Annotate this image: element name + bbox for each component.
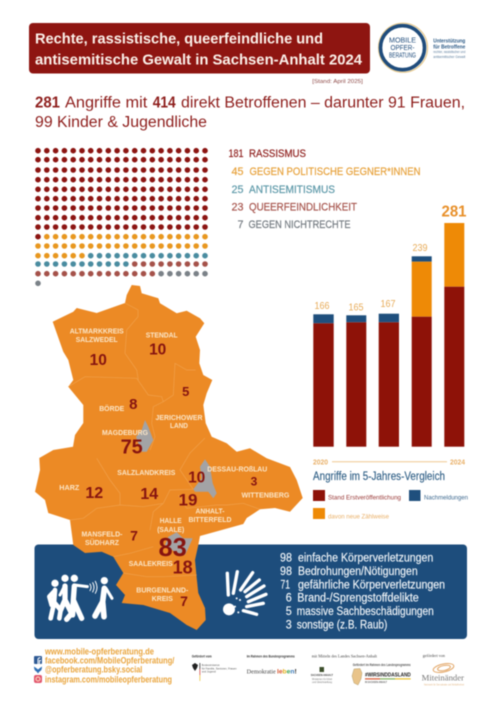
legend: motives: 23 (232, 202, 244, 214)
bar 2021 (346, 302, 366, 447)
legend: motives: GEGEN NICHTRECHTE (248, 219, 350, 231)
legend: motives: ANTISEMITISMUS (249, 184, 335, 196)
icon: bird (34, 666, 42, 674)
footer: web and social links: www.mobile-opferberatung.de (44, 646, 154, 657)
district numbers: 10 (149, 342, 166, 358)
district labels: JERICHOWER (156, 415, 202, 422)
icon: explosion (223, 572, 266, 615)
dots: Rassismus (38, 151, 205, 237)
list: offence types: Brand-/Sprengstoffdelikte (297, 592, 419, 604)
dots: Queerfeindlichkeit (38, 264, 205, 274)
list: offence types: 98 (280, 552, 292, 564)
district numbers: 18 (173, 558, 193, 578)
district numbers: 10 (188, 469, 205, 486)
sponsor: federal ministry: Bundesministerium (202, 663, 220, 667)
district labels: SAALEKREIS (129, 561, 173, 568)
district numbers: 75 (121, 436, 143, 458)
district labels: WITTENBERG (242, 492, 290, 500)
district labels: MAGDEBURG (102, 430, 149, 437)
list: offence types: einfache Körperverletzungen (298, 552, 433, 564)
list: offence types: 5 (286, 606, 292, 618)
sponsor: Wir sind das Land (352, 663, 411, 685)
district numbers: 5 (182, 384, 189, 399)
logo: Mobile Opferberatung: für Betroffene (433, 44, 465, 50)
district labels: BURGENLAND- (136, 588, 189, 594)
list: offence types: massive Sachbeschädigungen (297, 606, 434, 618)
district labels: DESSAU-ROßLAU (207, 466, 267, 474)
chart legend: davon neue Zählweise (328, 513, 389, 520)
district labels: HARZ (59, 485, 80, 492)
logo: Mobile Opferberatung (378, 23, 465, 72)
list: offence types: sonstige (z.B. Raub) (297, 619, 387, 631)
legend: motives: 181 (228, 148, 244, 160)
district labels (59, 328, 290, 603)
bar 2021: 165 (348, 302, 364, 314)
headline: 281 (35, 94, 60, 112)
logo: Mobile Opferberatung: antisemitischer Gewalt (433, 55, 465, 59)
dots: gegen Nichtrechte (38, 274, 205, 283)
time axis (313, 459, 465, 466)
sponsor: Land Sachsen-Anhalt: SACHSEN-ANHALT (311, 673, 333, 677)
district numbers: 8 (129, 396, 137, 413)
footer: web and social links: facebook.com/MobileOpferberatung/ (45, 655, 175, 666)
list: offence types (280, 552, 445, 631)
city: Halle (165, 532, 193, 555)
district labels: ANHALT- (196, 508, 225, 516)
district labels: BITTERFELD (188, 517, 232, 524)
bar 2020: 166 (314, 301, 330, 312)
district labels: (SAALE) (157, 527, 184, 534)
legend: motives: RASSISMUS (249, 148, 306, 160)
headline: Angriffe mit (65, 94, 148, 112)
legend: motives: 25 (232, 184, 244, 196)
sponsor: Demokratie leben (247, 654, 297, 676)
sponsor: Demokratie leben: leben! (277, 668, 297, 676)
logo: Mobile Opferberatung: BERATUNG (389, 52, 416, 60)
district labels: BÖRDE (99, 404, 125, 413)
district numbers: 14 (140, 486, 158, 503)
dots: Antisemitismus (38, 256, 205, 264)
footer: web and social links: instagram.com/mobileopferberatung (45, 674, 172, 685)
list: offence types: 98 (280, 566, 292, 578)
district labels: MANSFELD- (82, 532, 123, 538)
sponsor: Miteinander: Miteinänder (422, 672, 464, 682)
chart legend: Stand Erstveröffentlichung (328, 494, 401, 501)
district labels: SÜDHARZ (85, 538, 120, 547)
sponsor: Miteinander: Netzwerk für Demokratie und Weltoffenheit (424, 682, 464, 686)
legend: motives: 7 (238, 219, 244, 231)
sponsor: federal ministry: und Jugend (202, 670, 216, 674)
icon: instagram (34, 675, 42, 683)
bar 2022 (379, 299, 399, 447)
bar chart: attacks 2020-2024 (313, 204, 467, 466)
district numbers: 12 (85, 485, 103, 502)
headline: direkt Betroffenen – darunter 91 Frauen, (181, 94, 465, 112)
sponsor: federal ministry: Gefördert vom (192, 654, 212, 658)
list: offence types: Bedrohungen/Nötigungen (298, 566, 418, 578)
list: offence types: 71 (280, 579, 290, 591)
time axis: 2024 (450, 459, 465, 466)
list: offence types: 6 (286, 592, 292, 604)
logo: Mobile Opferberatung: rechter, rassistischer und (433, 50, 465, 54)
bar 2023: 239 (412, 243, 428, 254)
list: offence types: gefährliche Körperverletzungen (298, 579, 445, 591)
dots: gegen politische Gegner (38, 237, 205, 256)
sponsor: Miteinander (422, 653, 464, 686)
sponsor: Land Sachsen-Anhalt: mit Mitteln des Landes Sachsen-Anhalt (312, 654, 378, 658)
legend: motives: QUEERFEINDLICHKEIT (249, 202, 357, 214)
time axis: 2020 (313, 459, 328, 466)
district numbers: 7 (130, 528, 138, 544)
headline: 414 (153, 94, 176, 112)
footer: web and social links: @opferberatung.bsky.social (45, 665, 142, 676)
sponsor: federal ministry: für Familie, Senioren, Frauen (202, 666, 237, 670)
title banner (29, 23, 370, 74)
sponsor: Wir sind das Land: Gefördert im Rahmen des Landesprogramms (353, 663, 411, 667)
chart legend: Nachmeldungen (424, 494, 468, 501)
icon: attackers threatening a person (49, 575, 112, 619)
sponsor: Land Sachsen-Anhalt: und Gleichstellung (312, 680, 333, 684)
sponsor: federal ministry (192, 654, 237, 681)
title banner: antisemitische Gewalt in Sachsen-Anhalt 2024 (35, 52, 363, 68)
bar 2023 (412, 243, 432, 447)
district labels: HALLE (160, 518, 182, 525)
panel: types of offences (34, 544, 467, 639)
legend: motives: 45 (232, 166, 244, 178)
legend: motives: GEGEN POLITISCHE GEGNER*INNEN (250, 166, 421, 178)
title banner: Rechte, rassistische, queerfeindliche und (35, 30, 323, 47)
sponsor: Land Sachsen-Anhalt (311, 654, 378, 684)
sponsor: Demokratie leben: Demokratie (247, 670, 276, 676)
headline: 99 Kinder & Jugendliche (35, 114, 207, 131)
district numbers: 7 (180, 593, 188, 609)
chart caption: Angriffe im 5-Jahres-Vergleich (313, 471, 445, 483)
logo: Mobile Opferberatung: OPFER- (390, 45, 415, 52)
city: Magdeburg (136, 420, 153, 452)
district labels: KREIS (152, 596, 173, 603)
sponsor: Demokratie leben: Im Rahmen des Bundesprogramms (247, 654, 295, 658)
district labels: STENDAL (146, 332, 178, 340)
bar 2020 (313, 301, 334, 447)
district numbers: 83 (159, 534, 187, 562)
district numbers: 10 (90, 352, 107, 369)
dot matrix: 281 attacks by motive (38, 151, 205, 283)
district numbers (85, 342, 258, 609)
district numbers: 19 (179, 490, 197, 509)
map: Sachsen-Anhalt (35, 285, 303, 630)
district labels: SALZWEDEL (76, 337, 118, 344)
district labels: ALTMARKKREIS (70, 328, 124, 336)
district labels: SALZLANDKREIS (117, 470, 176, 477)
logo: Mobile Opferberatung: MOBILE (389, 38, 416, 44)
logo: Mobile Opferberatung: Unterstützung (433, 38, 465, 44)
sponsor: Miteinander: gefördert von (423, 653, 446, 658)
sponsor: Land Sachsen-Anhalt: Ministerium für Arbeit (312, 677, 332, 681)
bar 2022: 167 (380, 299, 396, 310)
date note: [Stand: April 2025] (312, 79, 363, 85)
city: Dessau-Roßlau (193, 459, 217, 498)
list: offence types: 3 (286, 619, 292, 631)
chart legend (313, 490, 468, 520)
legend: motives (228, 148, 421, 231)
footer: web and social links (34, 646, 175, 685)
bar 2024: 281 (442, 204, 467, 220)
sponsor: Wir sind das Land: IN SACHSEN-ANHALT (365, 680, 387, 684)
district numbers: 3 (251, 474, 258, 488)
headline (35, 94, 465, 131)
sponsor: Wir sind das Land: #WIRSINDDASLAND (365, 673, 411, 679)
district labels: LAND (170, 423, 188, 430)
bar 2024 (442, 204, 467, 447)
map outline (35, 285, 303, 630)
icon: facebook (34, 656, 42, 664)
